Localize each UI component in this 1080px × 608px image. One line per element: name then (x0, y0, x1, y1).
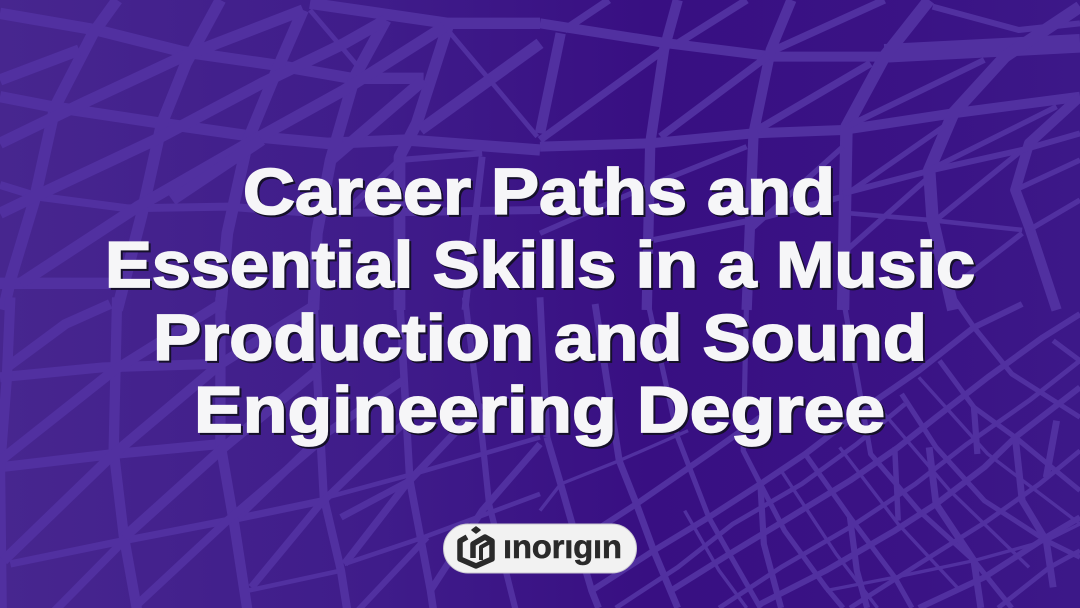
title: Essential Skills in a Music (105, 228, 975, 301)
title: Engineering Degree (194, 373, 885, 446)
title (105, 155, 975, 446)
icon: inorigin hexagon mark (460, 527, 492, 566)
title: Career Paths and (243, 155, 835, 228)
title: Production and Sound (153, 301, 927, 374)
logo wordmark: inorigin (503, 528, 622, 565)
logo: inorigin badge (444, 524, 636, 573)
